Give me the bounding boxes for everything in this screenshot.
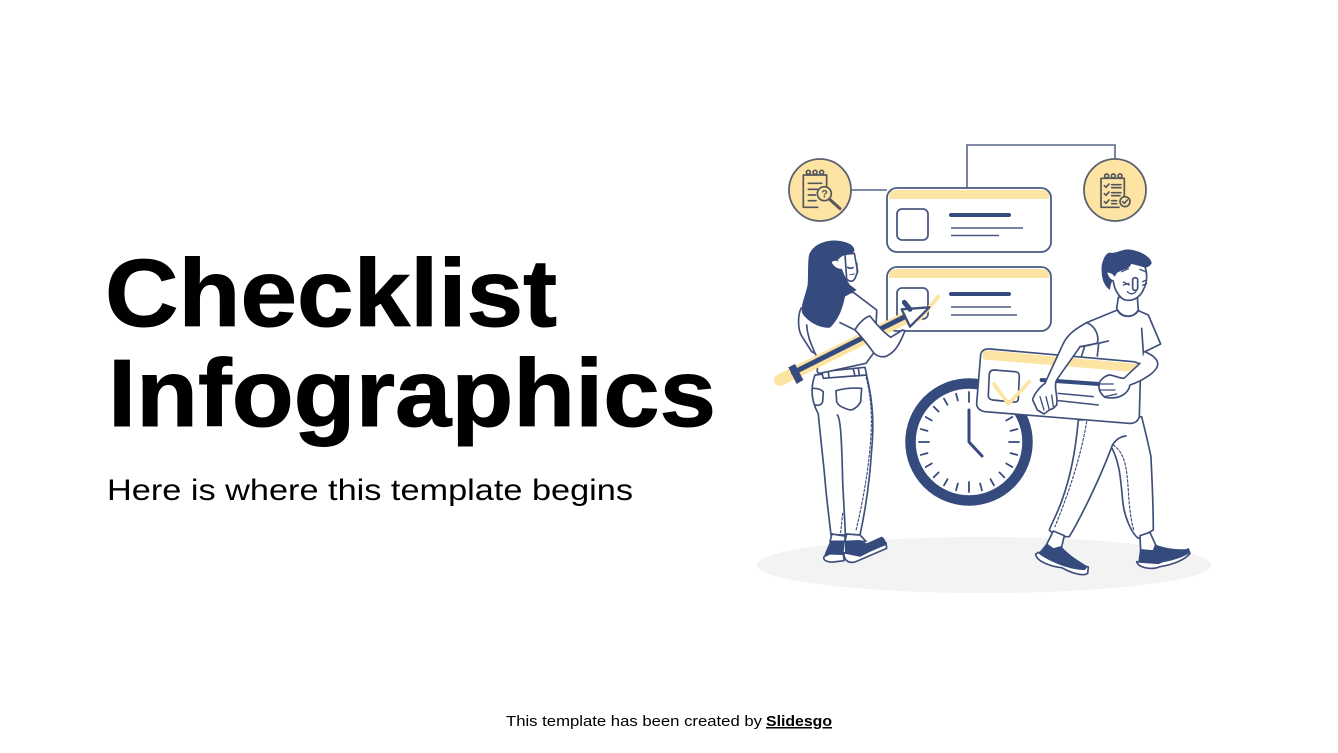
woman hair, shirt and face — [799, 292, 877, 373]
title: Infographics — [108, 340, 716, 447]
man shoes — [1036, 531, 1190, 575]
card: top checklist item — [887, 188, 1051, 252]
subtitle: Here is where this template begins — [107, 474, 633, 507]
man torso — [1063, 310, 1161, 423]
woman shoes — [824, 534, 887, 562]
clock — [910, 384, 1028, 500]
illustration: checklist team — [757, 145, 1211, 593]
connector lines — [851, 145, 1115, 190]
man figure — [977, 249, 1190, 575]
icon: clipboard with magnifier: ? — [821, 189, 828, 201]
title: Checklist — [105, 240, 557, 347]
large tilted checklist card — [977, 349, 1141, 423]
woman arm and hand — [840, 297, 938, 357]
man arms and hands — [1033, 323, 1158, 414]
icon: clipboard with magnifier — [789, 159, 851, 221]
icon: clipboard with checks — [1084, 159, 1146, 221]
man head and hair — [1102, 249, 1152, 316]
ground shadow — [757, 537, 1211, 593]
pencil — [780, 315, 908, 384]
woman figure — [780, 241, 938, 562]
footer credit: This template has been created by — [506, 713, 763, 730]
title — [105, 240, 716, 447]
footer credit: Slidesgo — [766, 713, 832, 730]
woman legs — [812, 367, 873, 535]
man legs — [1049, 417, 1153, 538]
card: second checklist item — [887, 267, 1051, 331]
woman hair and face detail — [802, 241, 858, 328]
